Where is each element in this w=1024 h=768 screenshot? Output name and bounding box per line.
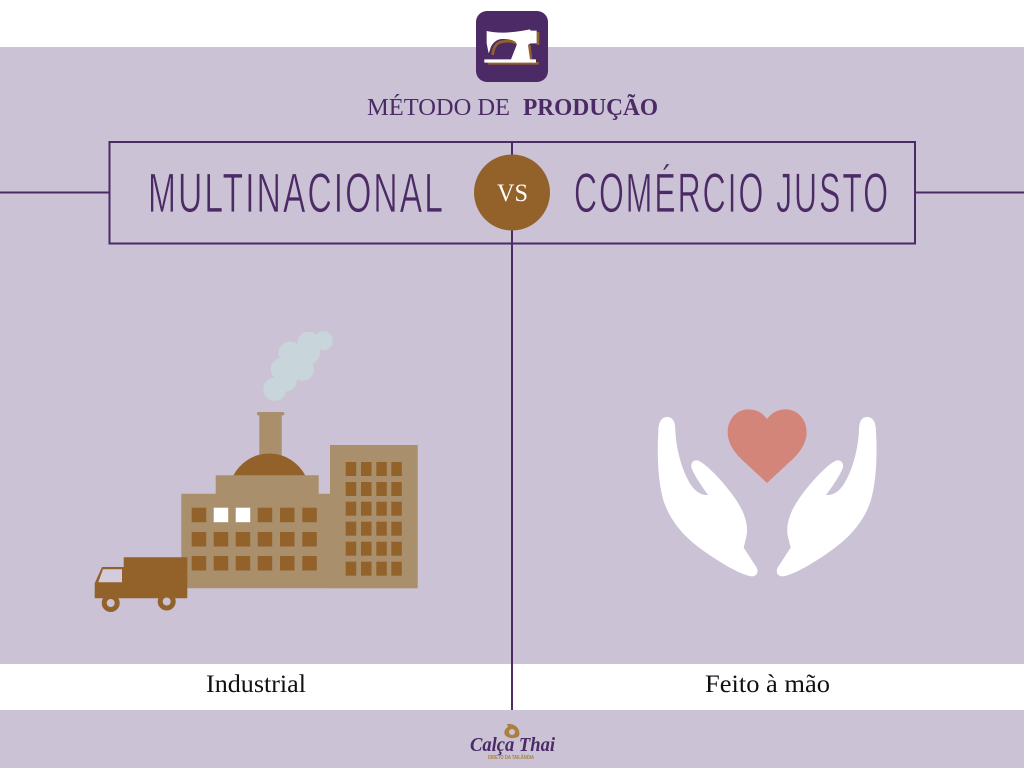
- heading: MÉTODO DE: [367, 95, 510, 121]
- chimney: [257, 412, 284, 456]
- vs badge: VS: [497, 180, 528, 207]
- hands: [658, 417, 877, 576]
- illustration: factory and truck: [95, 331, 418, 610]
- connector lines: [0, 142, 1024, 710]
- main windows: [192, 508, 317, 570]
- heading: [367, 95, 658, 121]
- illustration: hands holding heart: [658, 409, 877, 576]
- tower windows: [346, 462, 402, 576]
- logo: DIRETO DA TAILÂNDIA: [488, 754, 534, 761]
- title: multinacional: MULTINACIONAL: [148, 161, 445, 224]
- smoke: [263, 331, 333, 401]
- truck: [95, 557, 187, 610]
- heading: PRODUÇÃO: [523, 95, 658, 121]
- logo: Calça Thai: [470, 734, 555, 756]
- heart: [728, 409, 807, 483]
- label: industrial: Industrial: [206, 671, 306, 698]
- vs badge: [474, 154, 550, 230]
- tower: [330, 445, 418, 588]
- main building: [181, 475, 330, 588]
- label band: industrial / handmade: [0, 664, 1024, 710]
- label: feito à mão: Feito à mão: [705, 671, 830, 698]
- logo: [470, 724, 555, 761]
- dome: [233, 454, 305, 476]
- title box: [110, 142, 915, 244]
- icon: sewing machine: [476, 11, 548, 82]
